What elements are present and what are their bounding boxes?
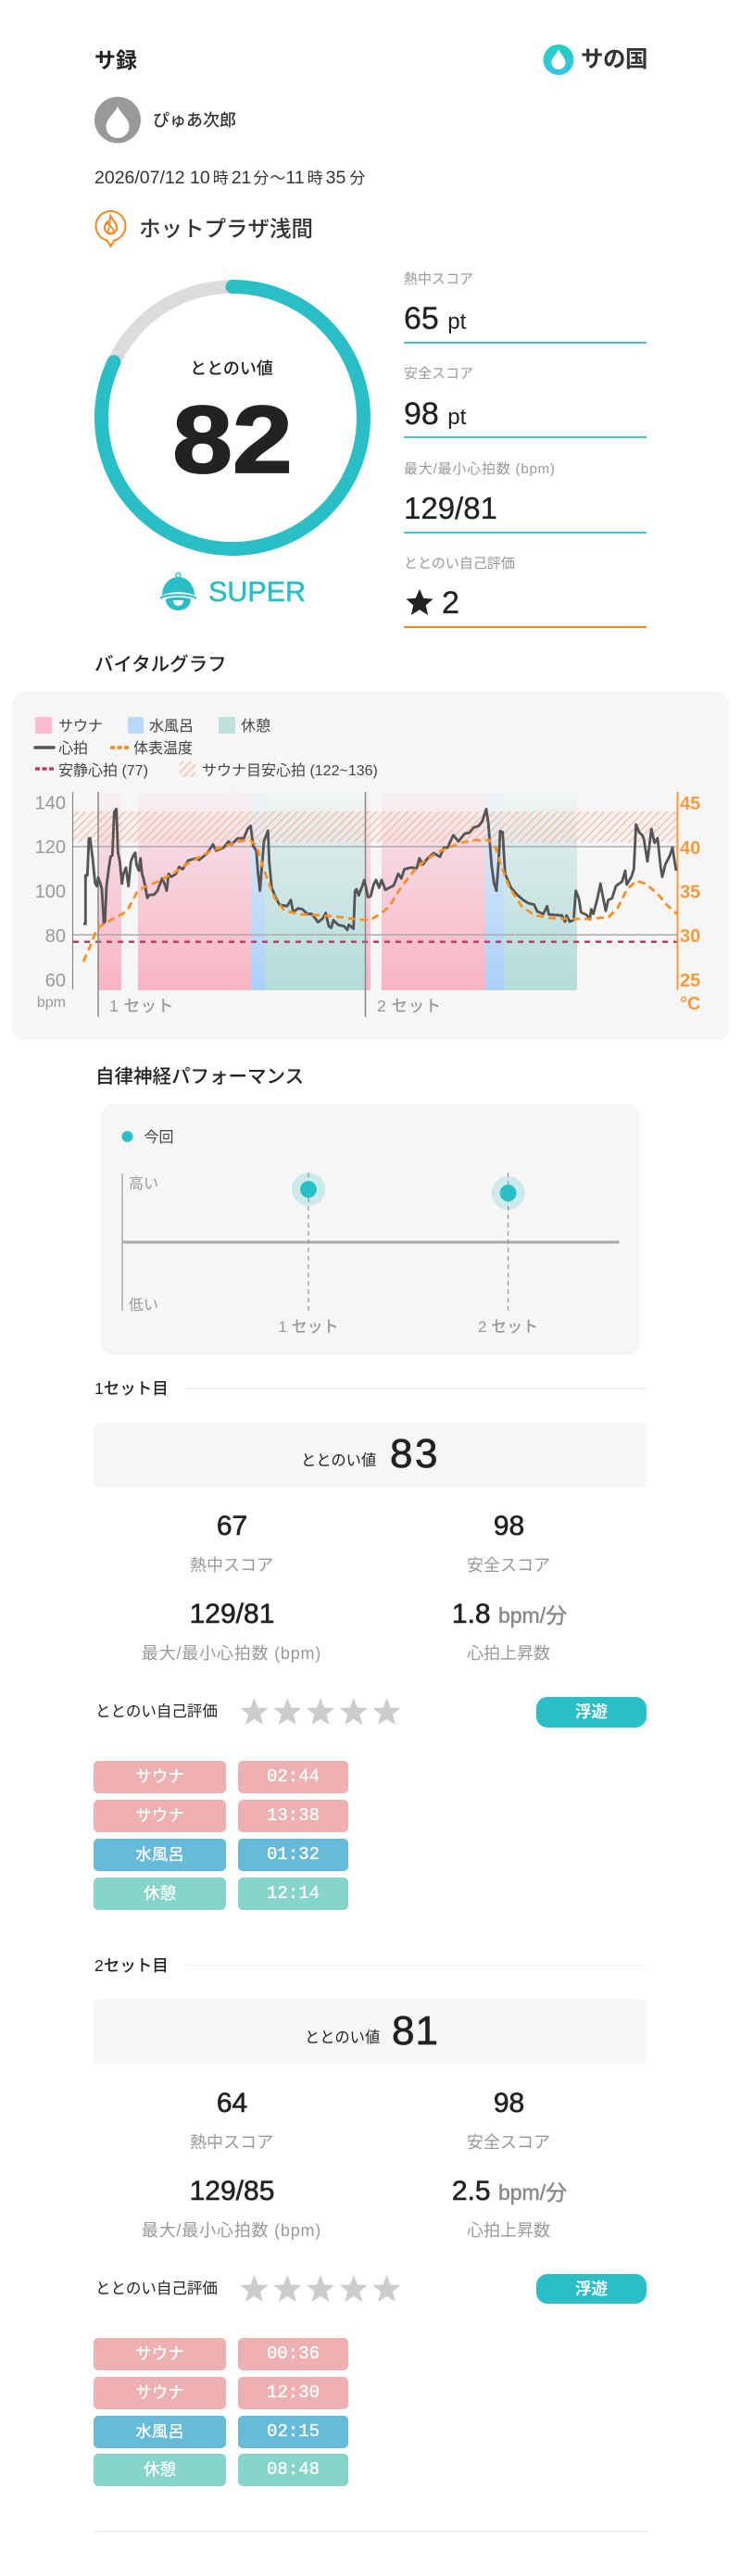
phase: サウナ: サウナ [135, 1806, 184, 1825]
set labels: 2 セット [377, 997, 442, 1015]
left axis labels [35, 793, 66, 1011]
legend: サウナ: サウナ [58, 718, 103, 735]
value: 98 [494, 1511, 524, 1541]
time: 13:38 [267, 1805, 320, 1826]
phase table [94, 1761, 348, 1910]
panel: set 2 [94, 1956, 647, 2486]
rank text: SUPER [208, 576, 306, 608]
legend: 今回 [122, 1129, 174, 1146]
axis labels: 高い [129, 1175, 158, 1192]
score value: 81 [392, 2008, 439, 2053]
legend: 水風呂: 水風呂 [149, 718, 194, 735]
心拍上昇数 [452, 1599, 567, 1663]
panel: set 1 [94, 1379, 647, 1910]
phase: サウナ [94, 1800, 226, 1832]
logo text: サの国 [581, 47, 647, 72]
label: 最大/最小心拍数 (bpm) [142, 2221, 321, 2240]
legend: 心拍: 心拍 [58, 740, 88, 757]
icon: user avatar [94, 96, 141, 143]
legend: サウナ目安心拍: サウナ目安心拍 (122~136) [202, 762, 378, 779]
legend: 休憩: 休憩 [241, 718, 270, 735]
phase: 水風呂: 水風呂 [135, 2421, 184, 2440]
value: 2 [442, 585, 459, 621]
gauge label: ととのい値 [190, 359, 273, 378]
安全スコア [467, 2088, 550, 2151]
legend: 体表温度 [110, 740, 193, 757]
time [238, 2338, 348, 2369]
label: 心拍上昇数 [467, 2221, 550, 2240]
label: 心拍上昇数 [467, 1644, 550, 1663]
label: 熱中スコア [404, 271, 473, 287]
最大/最小心拍数 [404, 461, 647, 534]
label: 安全スコア [404, 366, 473, 382]
right axis labels: 35 [680, 882, 700, 902]
time: 02:44 [267, 1766, 320, 1787]
right axis labels: 45 [680, 794, 700, 814]
stars [241, 2275, 400, 2302]
panel: autonomic performance [101, 1104, 640, 1355]
legend: 休憩 [219, 717, 270, 735]
target heart-rate band [73, 811, 677, 843]
legend [35, 717, 378, 779]
left axis labels: 100 [35, 882, 66, 902]
rating tag: 浮遊 [575, 2279, 608, 2297]
icon: logo drop [543, 44, 574, 75]
set score panel [94, 1423, 647, 1486]
time: 12:30 [267, 2382, 320, 2403]
score value: 83 [390, 1431, 440, 1476]
rating tag [536, 2273, 647, 2304]
facility name: ホットプラザ浅間 [139, 217, 313, 241]
time: 00:36 [267, 2344, 320, 2364]
time [238, 1839, 348, 1871]
heading: 2セット目: 2セット目 [94, 1956, 169, 1975]
legend: 今回: 今回 [144, 1129, 174, 1146]
axis labels: 低い [129, 1297, 158, 1313]
rating tag [536, 1697, 647, 1727]
set labels [109, 997, 442, 1015]
phase: 休憩 [94, 1877, 226, 1910]
time [238, 2416, 348, 2447]
最大/最小心拍数 [142, 2175, 321, 2240]
left axis labels: 60 [45, 971, 66, 991]
phase: 休憩: 休憩 [144, 2460, 176, 2479]
axis labels [129, 1175, 158, 1313]
left axis labels: bpm [37, 995, 66, 1011]
right axis labels: °C [680, 994, 700, 1014]
phase: 休憩: 休憩 [144, 1884, 176, 1903]
value: 65 pt [404, 301, 466, 336]
user name: ぴゅあ次郎 [153, 111, 236, 130]
icon: sauna facility pin [94, 210, 126, 248]
panel: vital graph [12, 692, 729, 1040]
vital chart [33, 717, 700, 1017]
heart-rate line [83, 809, 676, 930]
point: 2セット [478, 1173, 538, 1336]
value: 129/85 [190, 2175, 274, 2206]
time [238, 1761, 348, 1793]
heading: 1セット目: 1セット目 [94, 1379, 169, 1398]
phase: 水風呂: 水風呂 [135, 1845, 184, 1864]
self rating label: ととのい自己評価 [95, 1703, 218, 1720]
value: 1.8 bpm/分 [452, 1599, 567, 1629]
point: 1セット [278, 1173, 339, 1336]
phase: 水風呂 [94, 2416, 226, 2447]
label: 熱中スコア [190, 2132, 273, 2151]
phase: サウナ: サウナ [135, 2344, 184, 2362]
time: 12:14 [267, 1882, 320, 1903]
value: 129/81 [190, 1599, 274, 1629]
rank badge: SUPER [159, 572, 306, 610]
resting heart-rate line [73, 940, 677, 943]
rating tag: 浮遊 [575, 1703, 608, 1721]
title: サ録 [94, 48, 137, 72]
phase: サウナ: サウナ [135, 2382, 184, 2401]
time [238, 2454, 348, 2486]
label: ととのい自己評価 [404, 556, 515, 572]
安全スコア [404, 366, 647, 438]
score label: ととのい値 [301, 1452, 376, 1469]
phase: サウナ [94, 2338, 226, 2369]
gauge: ととのい値 ring [94, 280, 370, 556]
time: 02:15 [267, 2421, 320, 2442]
score list [404, 271, 647, 628]
phase: サウナ [94, 1761, 226, 1793]
stars [241, 1698, 400, 1725]
heading: 自律神経パフォーマンス: 自律神経パフォーマンス [95, 1066, 304, 1087]
value: 64 [217, 2088, 247, 2117]
gauge value: 82 [172, 386, 293, 493]
time: 01:32 [267, 1844, 320, 1865]
left axis labels: 80 [45, 926, 66, 947]
legend: 体表温度: 体表温度 [133, 740, 193, 757]
legend: 心拍 [35, 740, 88, 757]
legend: 安静心拍: 安静心拍 (77) [58, 762, 148, 779]
熱中スコア [190, 2088, 273, 2151]
point: 2セット: 2 セット [478, 1318, 538, 1336]
phase table [94, 2338, 348, 2486]
熱中スコア [404, 271, 647, 344]
value: 67 [217, 1511, 247, 1541]
value: 98 pt [404, 396, 466, 432]
session date: 2026/07/12 10時21分〜11時35分 [94, 168, 365, 188]
left axis labels: 120 [35, 837, 66, 858]
phase bands [98, 787, 577, 990]
self rating label: ととのい自己評価 [95, 2281, 218, 2297]
right axis labels: 25 [680, 971, 700, 991]
time [238, 1877, 348, 1910]
label: 熱中スコア [190, 1556, 273, 1575]
value: 98 [494, 2088, 524, 2117]
phase: 休憩 [94, 2454, 226, 2486]
label: 安全スコア [467, 1556, 550, 1575]
right axis labels [680, 794, 700, 1014]
label: 最大/最小心拍数 (bpm) [142, 1644, 321, 1663]
left axis labels: 140 [35, 793, 66, 813]
icon: star [406, 589, 433, 615]
phase: サウナ: サウナ [135, 1767, 184, 1786]
right axis labels: 30 [680, 926, 700, 947]
gauge ring [94, 280, 370, 556]
logo: サの国 [543, 44, 647, 75]
label: 安全スコア [467, 2132, 550, 2151]
phase: サウナ [94, 2377, 226, 2408]
legend: 水風呂 [128, 717, 194, 735]
phase: 水風呂 [94, 1839, 226, 1871]
set labels: 1 セット [109, 997, 174, 1015]
label: 最大/最小心拍数 (bpm) [404, 461, 556, 477]
安全スコア [467, 1511, 550, 1575]
axes [122, 1174, 619, 1311]
legend: サウナ [35, 717, 103, 735]
set score panel [94, 1999, 647, 2064]
ととのい自己評価 [404, 556, 647, 628]
time [238, 1800, 348, 1832]
value: 2.5 bpm/分 [452, 2175, 567, 2206]
time: 08:48 [267, 2459, 320, 2480]
heading: バイタルグラフ: バイタルグラフ [94, 654, 227, 675]
value: 129/81 [404, 491, 497, 525]
熱中スコア [190, 1511, 273, 1575]
icon: sauna hat [159, 572, 196, 610]
心拍上昇数 [452, 2175, 567, 2240]
right axis labels: 40 [680, 838, 700, 859]
skin temperature line [83, 840, 677, 961]
time [238, 2377, 348, 2408]
point: 1セット: 1 セット [278, 1318, 339, 1336]
score label: ととのい値 [305, 2029, 380, 2045]
axes [72, 792, 678, 1017]
autonomic chart [121, 1129, 619, 1336]
最大/最小心拍数 [142, 1599, 321, 1663]
